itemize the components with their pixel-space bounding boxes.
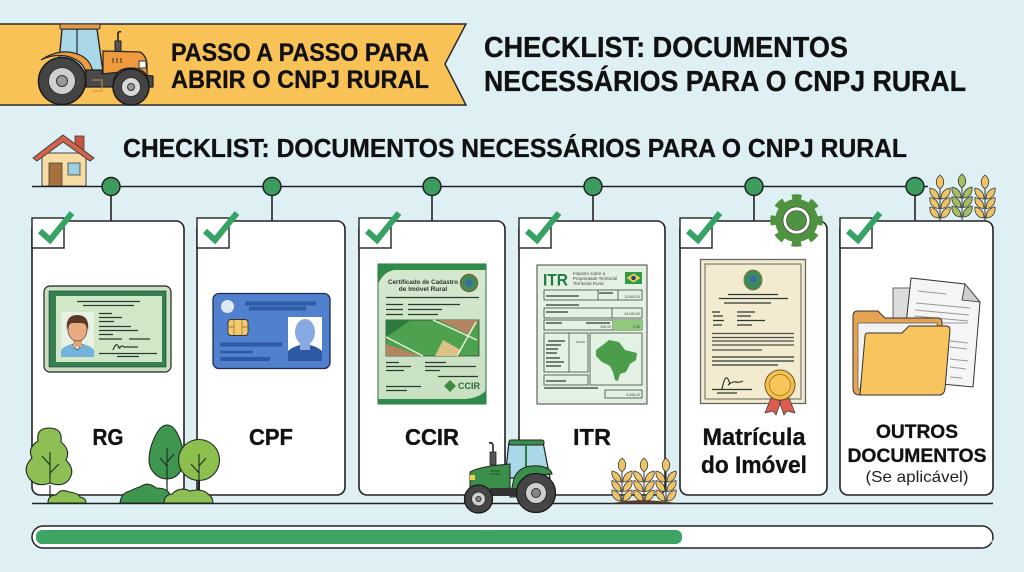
icon: CPF card <box>213 294 330 368</box>
label: DOCUMENTOS <box>848 445 986 467</box>
icon: check <box>367 213 399 240</box>
label: CPF <box>249 424 293 450</box>
document: ITR: 206,00 <box>600 325 611 329</box>
banner title: ABRIR O CNPJ RURAL <box>171 66 429 94</box>
panel: outros documentos <box>840 213 993 495</box>
sparkle <box>970 526 999 548</box>
panel: Matrícula do Imóvel <box>680 213 827 495</box>
icon: check <box>527 213 559 240</box>
icon: orange tractor <box>38 24 153 105</box>
icon: folder with documents <box>853 278 980 395</box>
progress bar <box>32 526 993 548</box>
document: ITR: 100,00 <box>576 340 585 344</box>
icon: green tractor <box>464 440 556 513</box>
label: ITR <box>573 424 611 450</box>
timeline <box>32 178 928 221</box>
document: CCIR: de Imóvel Rural <box>399 286 447 293</box>
document: ITR: Territorial Rural <box>573 281 604 286</box>
heading: CHECKLIST: DOCUMENTOS NECESSÁRIOS PARA O CNPJ RURAL <box>123 133 907 163</box>
document: CCIR: Certificado de Cadastro <box>388 279 458 286</box>
panel: CPF <box>197 213 345 495</box>
tree 3 <box>178 440 220 503</box>
banner title: PASSO A PASSO PARA <box>171 39 429 67</box>
note: (Se aplicável) <box>866 469 968 486</box>
bushes <box>48 484 213 503</box>
title top right: NECESSÁRIOS PARA O CNPJ RURAL <box>484 64 966 98</box>
document: ITR: Propriedade Territorial <box>573 276 617 281</box>
tree 2 <box>149 425 184 503</box>
document: ITR <box>537 265 647 404</box>
document: CCIR: CCIR <box>458 381 480 391</box>
label: OUTROS <box>876 421 958 443</box>
document: ITR: 13.500,00 <box>624 295 640 299</box>
trees left <box>26 425 220 503</box>
label: do Imóvel <box>701 452 807 479</box>
icon: check <box>205 213 237 240</box>
ground line <box>32 502 993 504</box>
document: CCIR <box>378 264 486 404</box>
icon: check <box>688 213 720 240</box>
icon: check <box>848 213 880 240</box>
title top right: CHECKLIST: DOCUMENTOS <box>484 32 848 64</box>
document: ITR: Imposto sobre a <box>573 271 606 276</box>
label: Matrícula <box>702 424 806 451</box>
tree 1 <box>26 428 72 503</box>
icon: wheat bottom <box>610 458 680 504</box>
icon: check <box>40 213 72 240</box>
document: ITR: ITR <box>543 270 568 290</box>
icon: house <box>33 135 94 186</box>
banner: passo a passo <box>0 24 466 105</box>
panel: ITR <box>519 213 665 495</box>
icon: gear <box>773 197 820 244</box>
document: ITR: 24.000,00 <box>624 312 640 316</box>
icon: RG card <box>44 286 171 372</box>
panel: RG <box>32 213 184 495</box>
document: ITR: 0,00 <box>633 325 640 329</box>
label: RG <box>92 424 124 450</box>
icon: wheat top right <box>930 174 995 221</box>
panel: CCIR <box>359 213 505 495</box>
document: ITR: 5.068,00 <box>626 393 640 397</box>
label: CCIR <box>405 424 459 450</box>
document: matrícula <box>700 260 806 415</box>
